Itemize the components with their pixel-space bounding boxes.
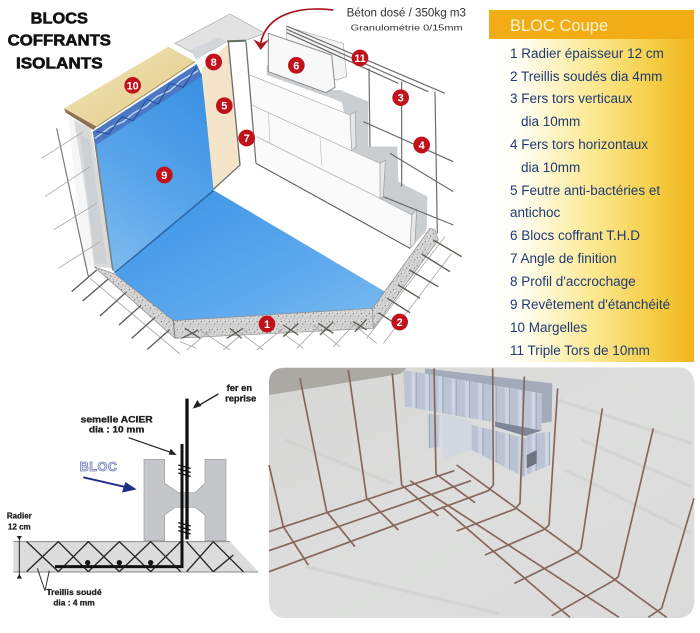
bloc 6 <box>267 27 368 115</box>
legend items: 9 Revêtement d'étanchéité <box>510 297 670 312</box>
section diagram <box>7 383 258 608</box>
mesh <box>27 542 243 572</box>
legend header <box>489 10 694 39</box>
numbered markers: 3 <box>398 93 404 105</box>
legend items: antichoc <box>510 205 561 220</box>
background wall <box>269 368 407 395</box>
legend items: dia 10mm <box>521 114 580 129</box>
fer en reprise label: reprise <box>225 394 256 404</box>
numbered markers: 6 <box>293 60 299 72</box>
numbered markers: 10 <box>127 80 139 92</box>
numbered markers: 4 <box>419 140 426 152</box>
frieze <box>93 64 202 145</box>
photo background <box>269 367 694 618</box>
title: COFFRANTS <box>8 33 111 50</box>
radier label <box>7 512 32 579</box>
legend items: 10 Margelles <box>510 320 588 335</box>
blue floor <box>115 190 385 321</box>
concrete texture <box>285 400 692 613</box>
revetement blue wall <box>96 73 214 273</box>
bar dots <box>85 560 153 565</box>
left wall side <box>68 115 115 272</box>
site photo <box>269 367 694 618</box>
BLOC label <box>80 460 137 493</box>
red arrow <box>253 9 333 50</box>
legend items: dia 10mm <box>521 160 580 175</box>
numbered markers: 11 <box>354 53 366 65</box>
concrete note: Béton dosé / 350kg m3 <box>347 6 466 20</box>
white floor edge <box>256 163 410 248</box>
feutre panel <box>202 43 240 188</box>
slab edges <box>13 542 258 572</box>
legend header: BLOC Coupe <box>510 17 608 35</box>
pool cutaway diagram <box>8 6 466 354</box>
legend items <box>510 46 670 358</box>
panel: legend BLOC Coupe <box>489 10 694 362</box>
steel bars <box>55 399 191 567</box>
insulated blocks <box>403 368 552 477</box>
margelle <box>64 47 195 130</box>
bars sticking out <box>72 240 462 349</box>
legend items: 3 Fers tors verticaux <box>510 91 633 106</box>
legend background <box>489 39 694 362</box>
legend items: 6 Blocs coffrant T.H.D <box>510 228 640 243</box>
treillis label <box>37 568 102 608</box>
semelle acier label: semelle ACIER <box>81 414 153 424</box>
semelle acier label <box>81 414 177 455</box>
treillis label: dia : 4 mm <box>53 599 95 608</box>
angle de finition <box>213 41 256 189</box>
title <box>8 10 111 72</box>
radier slab <box>13 542 258 572</box>
radier label: 12 cm <box>8 523 31 532</box>
legend items: 7 Angle de finition <box>510 251 617 266</box>
numbered markers: 9 <box>161 170 167 182</box>
fer en reprise label <box>193 383 256 409</box>
rebars <box>57 26 453 277</box>
numbered markers: 7 <box>244 133 250 145</box>
numbered markers: 1 <box>264 319 270 331</box>
legend items: 2 Treillis soudés dia 4mm <box>510 69 662 84</box>
title: BLOCS <box>31 10 88 27</box>
legend items: 8 Profil d'accrochage <box>510 274 636 289</box>
fer en reprise label: fer en <box>227 383 252 393</box>
wall blocks <box>248 42 427 248</box>
floor seam <box>115 191 213 273</box>
concrete note <box>347 6 466 33</box>
legend items: 4 Fers tors horizontaux <box>510 137 648 152</box>
left and front rebars <box>42 132 452 354</box>
numbered markers: 8 <box>211 57 217 69</box>
H block <box>144 459 226 541</box>
title: ISOLANTS <box>16 55 103 72</box>
BLOC label: BLOC <box>80 460 117 474</box>
treillis label: Treillis soudé <box>46 588 102 597</box>
top concrete strip <box>175 14 265 60</box>
concrete slab <box>94 228 438 338</box>
numbered markers <box>124 50 430 332</box>
radier label: Radier <box>7 512 32 521</box>
legend items: 11 Triple Tors de 10mm <box>510 343 650 358</box>
legend items: 5 Feutre anti-bactéries et <box>510 183 660 198</box>
concrete note: Granulométrie 0/15mm <box>351 23 463 33</box>
numbered markers: 5 <box>221 101 227 113</box>
legend items: 1 Radier épaisseur 12 cm <box>510 46 664 61</box>
semelle acier label: dia : 10 mm <box>89 424 144 434</box>
rebar frame <box>269 368 694 617</box>
numbered markers: 2 <box>397 317 403 329</box>
